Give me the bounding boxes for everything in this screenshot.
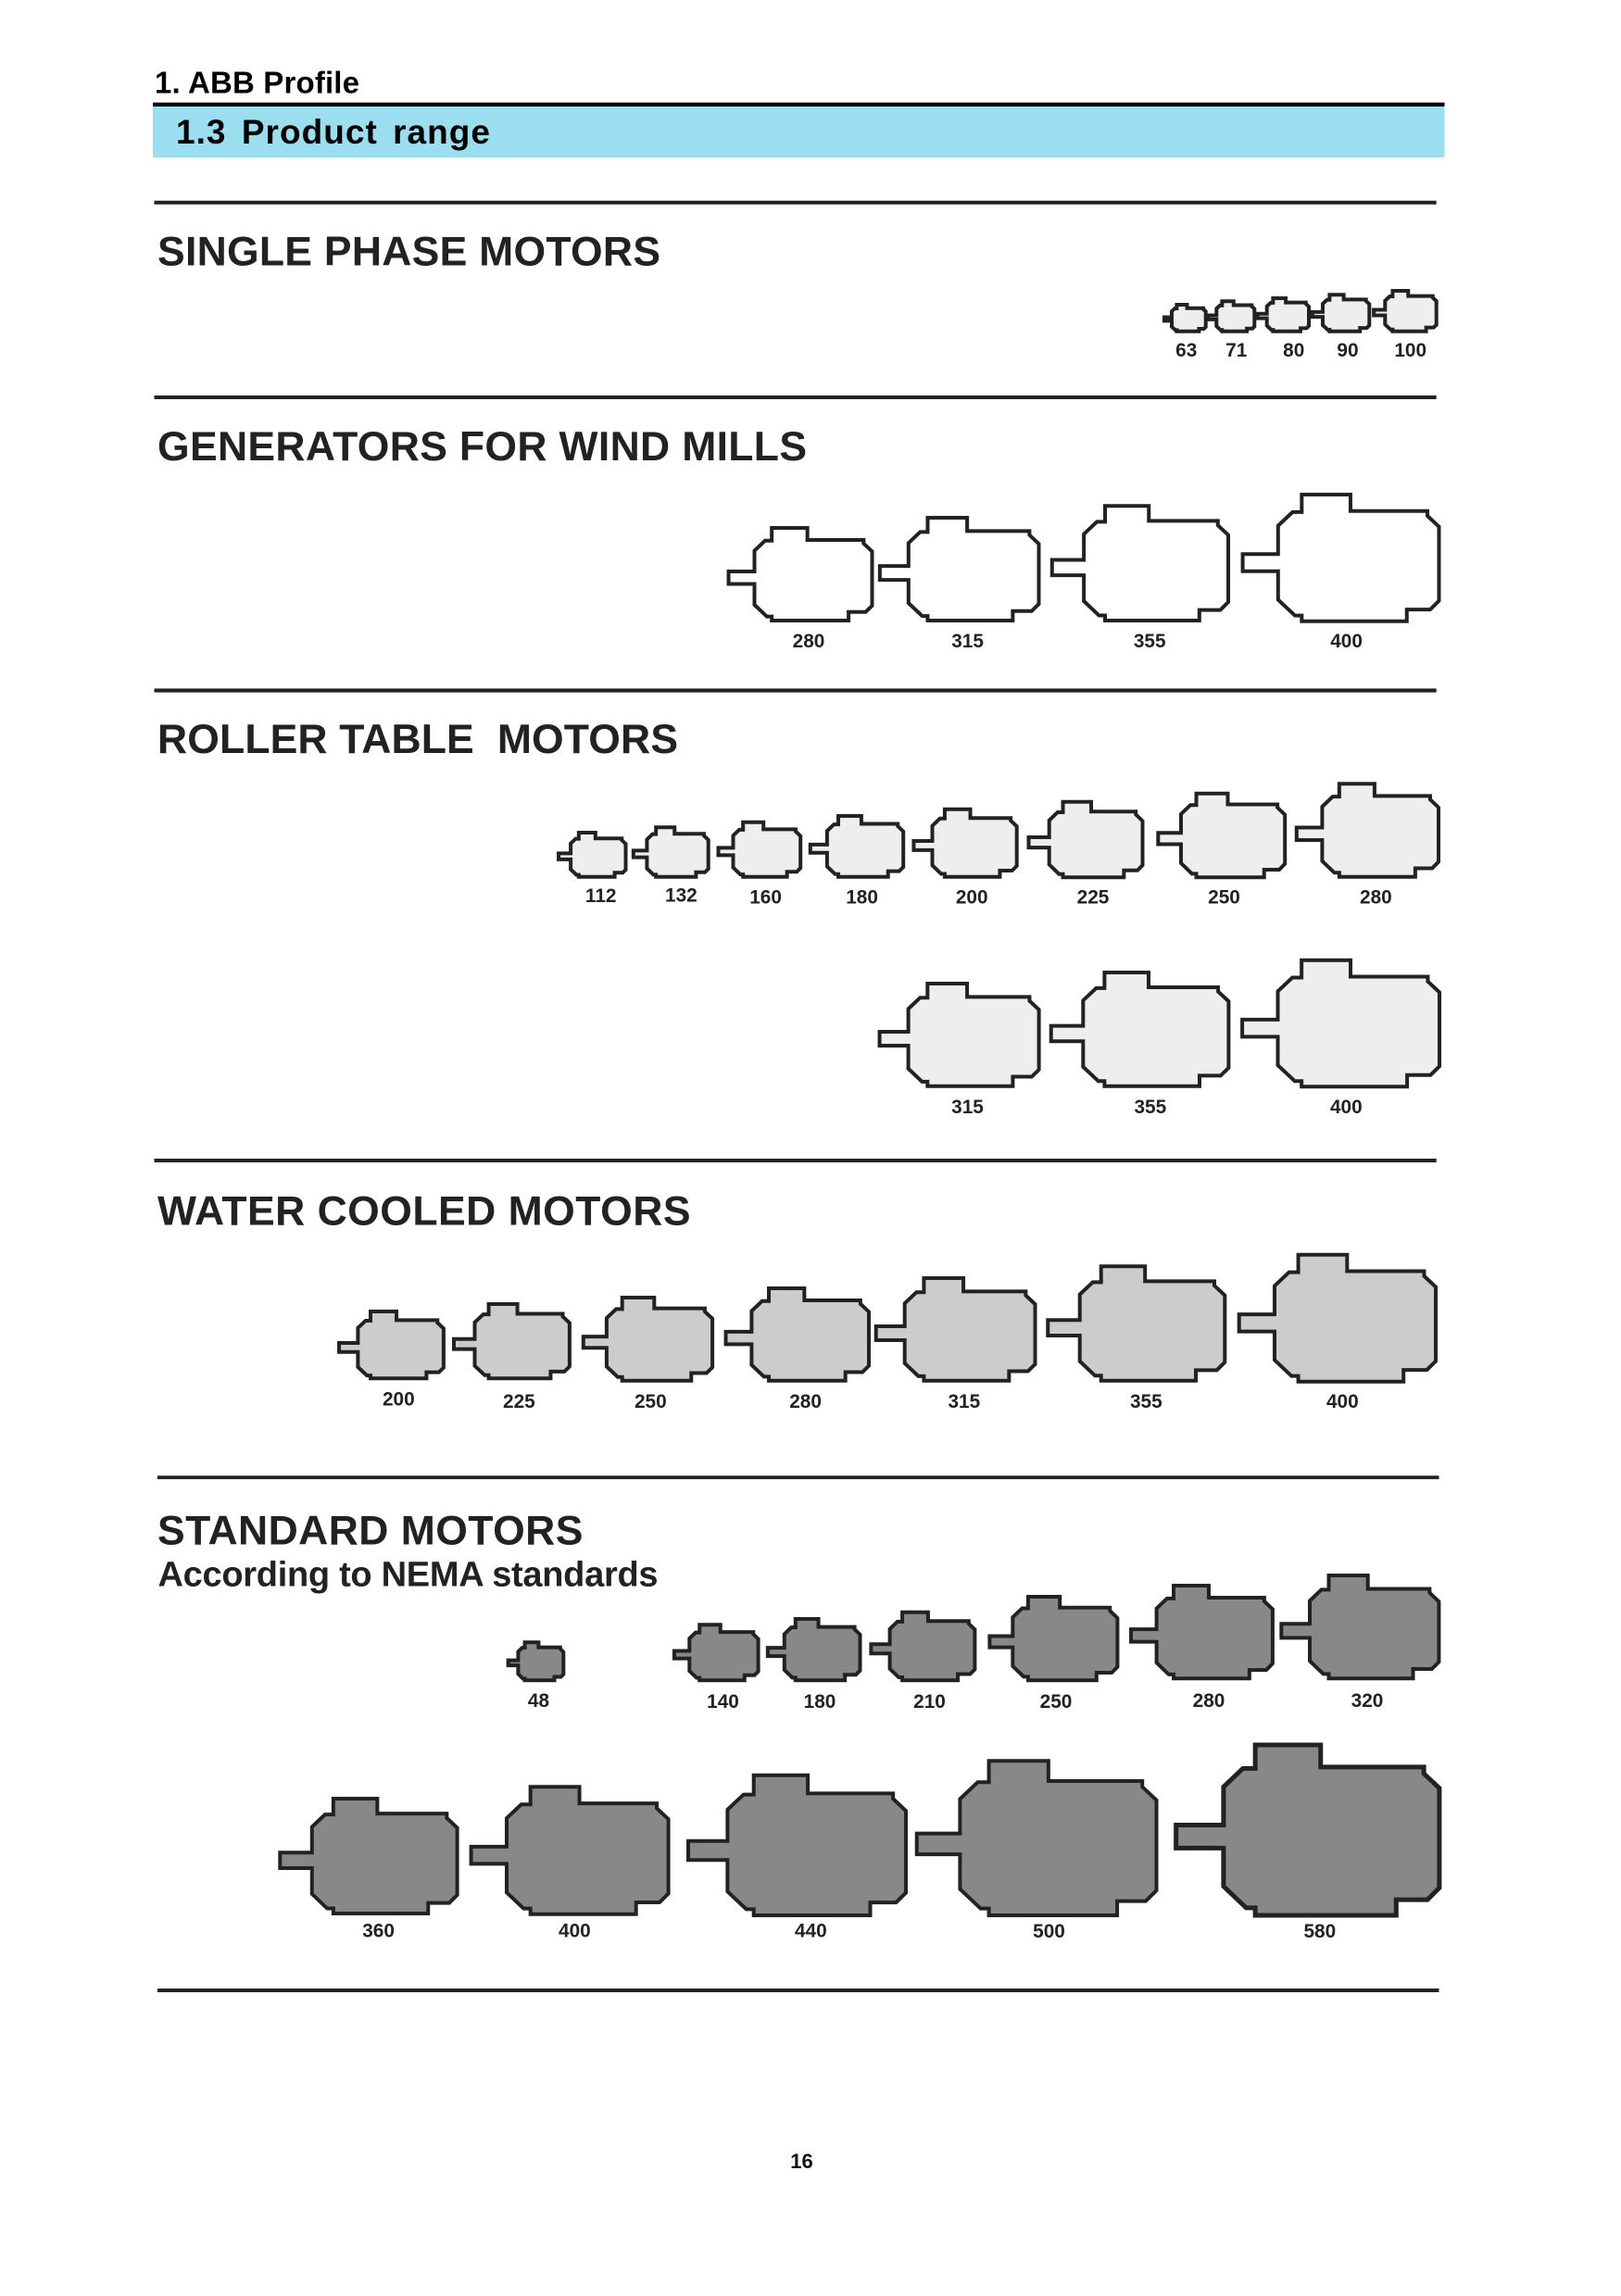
roller motor 200 (913, 809, 1017, 909)
section title: 1.3 Product range (176, 113, 490, 151)
heading: standard motors: STANDARD MOTORS (157, 1508, 583, 1553)
roller motor 355 (1051, 972, 1228, 1118)
NEMA motor 180: 180 (804, 1691, 836, 1713)
section banner (153, 107, 1445, 157)
motor 90 (1313, 295, 1369, 361)
NEMA motor 360: 360 (362, 1921, 395, 1942)
NEMA motor 180 (768, 1619, 860, 1713)
generator 280: 280 (793, 631, 824, 652)
NEMA motor 140 (674, 1625, 759, 1713)
water cooled motor 355: 355 (1130, 1391, 1162, 1412)
water cooled motor 250: 250 (635, 1391, 667, 1412)
NEMA motor 48 (509, 1642, 563, 1712)
NEMA motor 48: 48 (528, 1690, 549, 1712)
roller motor 180: 180 (846, 887, 878, 909)
roller motor 250 (1158, 794, 1285, 909)
roller motor 112 (559, 833, 626, 907)
water cooled motor 400 (1239, 1255, 1436, 1412)
NEMA motor 320 (1281, 1575, 1439, 1712)
water cooled motor 355 (1048, 1266, 1225, 1412)
generator 315: 315 (951, 631, 984, 652)
NEMA motor 280: 280 (1193, 1690, 1225, 1712)
panel: water cooled motors (157, 1189, 1436, 1412)
roller motor 280 (1297, 784, 1439, 909)
chapter heading: 1. ABB Profile (155, 66, 359, 100)
panel: single phase motors (157, 230, 1437, 361)
NEMA motor 360 (280, 1799, 458, 1942)
NEMA motor 400: 400 (559, 1921, 591, 1942)
roller motor 250: 250 (1208, 887, 1240, 909)
roller motor 160 (719, 822, 800, 909)
roller motor 160: 160 (749, 887, 782, 909)
motor 71 (1208, 301, 1254, 361)
generator 355: 355 (1134, 631, 1166, 652)
roller motor 112: 112 (585, 885, 616, 907)
NEMA motor 440: 440 (795, 1921, 827, 1942)
water cooled motor 250 (584, 1298, 712, 1412)
heading: water cooled motors: WATER COOLED MOTORS (157, 1189, 691, 1235)
NEMA motor 440 (688, 1775, 906, 1942)
motor 90: 90 (1337, 340, 1359, 361)
water cooled motor 200 (339, 1311, 444, 1411)
water cooled motor 280 (726, 1288, 869, 1412)
NEMA motor 250: 250 (1040, 1691, 1072, 1713)
motor 63: 63 (1175, 340, 1197, 361)
roller motor 315 (880, 984, 1039, 1118)
roller motor 132: 132 (665, 885, 697, 906)
roller motor 355: 355 (1134, 1097, 1166, 1118)
generator 315 (880, 518, 1039, 652)
motor 100: 100 (1394, 340, 1426, 361)
NEMA motor 250 (989, 1597, 1117, 1713)
generator 400 (1243, 495, 1439, 652)
panel: standard motors (157, 1508, 1439, 1942)
generator 400: 400 (1330, 631, 1363, 652)
water cooled motor 280: 280 (789, 1391, 822, 1412)
motor 80 (1258, 298, 1309, 361)
NEMA motor 580: 580 (1303, 1921, 1336, 1942)
roller motor 315: 315 (951, 1097, 984, 1118)
NEMA motor 400 (471, 1787, 669, 1942)
NEMA motor 500 (917, 1761, 1156, 1942)
generator 280 (729, 528, 873, 652)
motor 71: 71 (1225, 340, 1247, 361)
roller motor 180 (810, 816, 903, 909)
subheading: NEMA: According to NEMA standards (157, 1556, 658, 1595)
NEMA motor 210 (871, 1612, 974, 1713)
NEMA motor 140: 140 (707, 1691, 739, 1713)
roller motor 400 (1242, 960, 1439, 1118)
water cooled motor 200: 200 (383, 1389, 415, 1411)
motor 100 (1374, 291, 1437, 361)
NEMA motor 580 (1176, 1745, 1439, 1942)
panel: roller table motors (157, 717, 1439, 1118)
water cooled motor 225 (454, 1304, 570, 1412)
roller motor 400: 400 (1330, 1097, 1363, 1118)
panel: generators for wind mills (157, 424, 1439, 652)
NEMA motor 320: 320 (1351, 1690, 1383, 1712)
roller motor 225: 225 (1077, 887, 1109, 909)
water cooled motor 315 (876, 1278, 1036, 1412)
water cooled motor 225: 225 (503, 1391, 535, 1412)
roller motor 200: 200 (956, 887, 988, 909)
motor 80: 80 (1283, 340, 1304, 361)
page number: 16 (790, 2150, 813, 2173)
NEMA motor 210: 210 (913, 1691, 946, 1713)
roller motor 225 (1029, 802, 1143, 909)
water cooled motor 315: 315 (948, 1391, 980, 1412)
heading: single phase motors: SINGLE PHASE MOTORS (157, 230, 660, 275)
motor 63 (1164, 305, 1206, 361)
generator 355 (1052, 506, 1228, 652)
roller motor 132 (634, 827, 709, 906)
roller motor 280: 280 (1360, 887, 1392, 909)
NEMA motor 280 (1131, 1586, 1273, 1712)
heading: roller table motors: ROLLER TABLE MOTORS (157, 717, 678, 762)
water cooled motor 400: 400 (1326, 1391, 1359, 1412)
heading: generators: GENERATORS FOR WIND MILLS (157, 424, 807, 470)
NEMA motor 500: 500 (1033, 1921, 1065, 1942)
